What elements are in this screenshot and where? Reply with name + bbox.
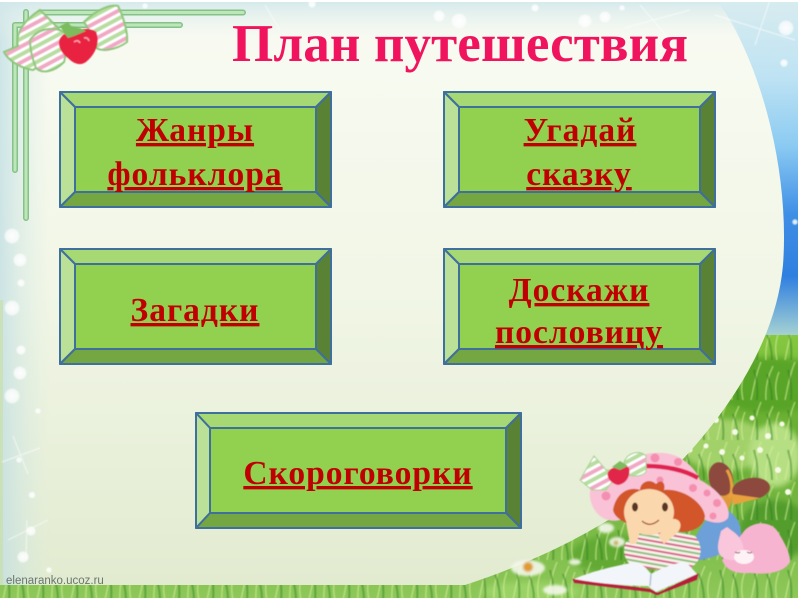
button: Доскажи пословицу — [444, 249, 715, 364]
corner ornament: ribbon bow — [4, 6, 127, 71]
face — [624, 489, 674, 535]
button: Угадай сказку — [444, 92, 715, 207]
open book — [574, 562, 697, 594]
legs and shoes — [690, 460, 771, 562]
button: Скороговорки — [196, 413, 521, 528]
hat — [590, 453, 729, 523]
button: Доскажи пословицу: пословицу — [495, 314, 663, 351]
background: sky — [0, 0, 800, 345]
button: Загадки — [60, 249, 331, 364]
title: План путешествия — [232, 15, 688, 73]
hair — [613, 481, 705, 532]
button: Жанры фольклора: фольклора — [107, 156, 283, 193]
hat bow and strawberry — [580, 453, 646, 490]
button: Жанры фольклора — [60, 92, 331, 207]
button: Жанры фольклора: Жанры — [136, 112, 254, 149]
daisies in the grass — [511, 523, 625, 595]
striped sweater — [624, 531, 701, 569]
button: Угадай сказку: Угадай — [524, 112, 636, 149]
button: Доскажи пословицу: Доскажи — [509, 272, 649, 309]
corner ornament: frame lines — [15, 12, 243, 218]
hands — [626, 519, 681, 544]
button: Угадай сказку: сказку — [526, 156, 632, 193]
background: meadow — [0, 335, 800, 600]
watermark: elenaranko.ucoz.ru — [6, 575, 104, 587]
button: Загадки: Загадки — [131, 292, 259, 329]
character: girl reading with a cat — [574, 453, 790, 594]
button: Скороговорки: Скороговорки — [243, 455, 473, 492]
cat — [718, 523, 790, 574]
icon: strawberry — [59, 22, 98, 64]
